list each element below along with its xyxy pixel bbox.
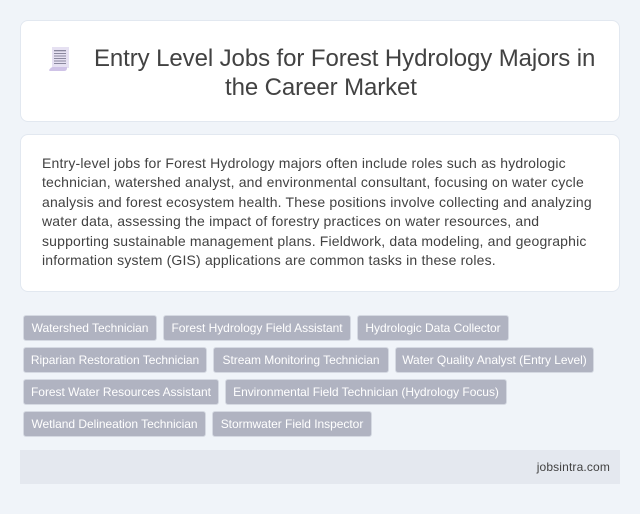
panel: description card — [20, 134, 620, 292]
job tags: Forest Hydrology Field Assistant — [171, 321, 343, 335]
job tags: Riparian Restoration Technician — [31, 353, 199, 367]
job tags: Forest Water Resources Assistant — [31, 385, 211, 399]
description text: analysis and forest ecosystem health. These positions involve collecting and analyzing — [42, 194, 592, 210]
job tags: Water Quality Analyst (Entry Level) — [402, 353, 587, 367]
job tags: Environmental Field Technician (Hydrology Focus) — [233, 385, 499, 399]
job tags: Hydrologic Data Collector — [365, 321, 501, 335]
title line 1: Entry Level Jobs for Forest Hydrology Majors in — [94, 45, 595, 72]
title line 2: the Career Market — [225, 74, 417, 101]
description text: supporting sustainable management plans. Fieldwork, data modeling, and geographic — [42, 233, 587, 249]
description text: information system (GIS) applications are common tasks in these roles. — [42, 252, 496, 268]
job tags: Stormwater Field Inspector — [221, 417, 363, 431]
job tags: Stream Monitoring Technician — [222, 353, 380, 367]
job tags: Wetland Delineation Technician — [31, 417, 198, 431]
job tags: Watershed Technician — [32, 321, 148, 335]
panel: title card — [20, 20, 620, 122]
description text: Entry-level jobs for Forest Hydrology majors often include roles such as hydrologic — [42, 155, 566, 171]
description text: water data, assessing the impact of forestry practices on water resources, and — [42, 213, 539, 229]
description text: technician, watershed analyst, and environmental consultant, focusing on water cycle — [42, 174, 584, 190]
icon: document scroll — [49, 47, 69, 71]
description text — [42, 155, 592, 268]
footer source text: jobsintra.com — [537, 460, 610, 474]
job tags — [23, 315, 594, 437]
footer bar — [20, 450, 620, 484]
